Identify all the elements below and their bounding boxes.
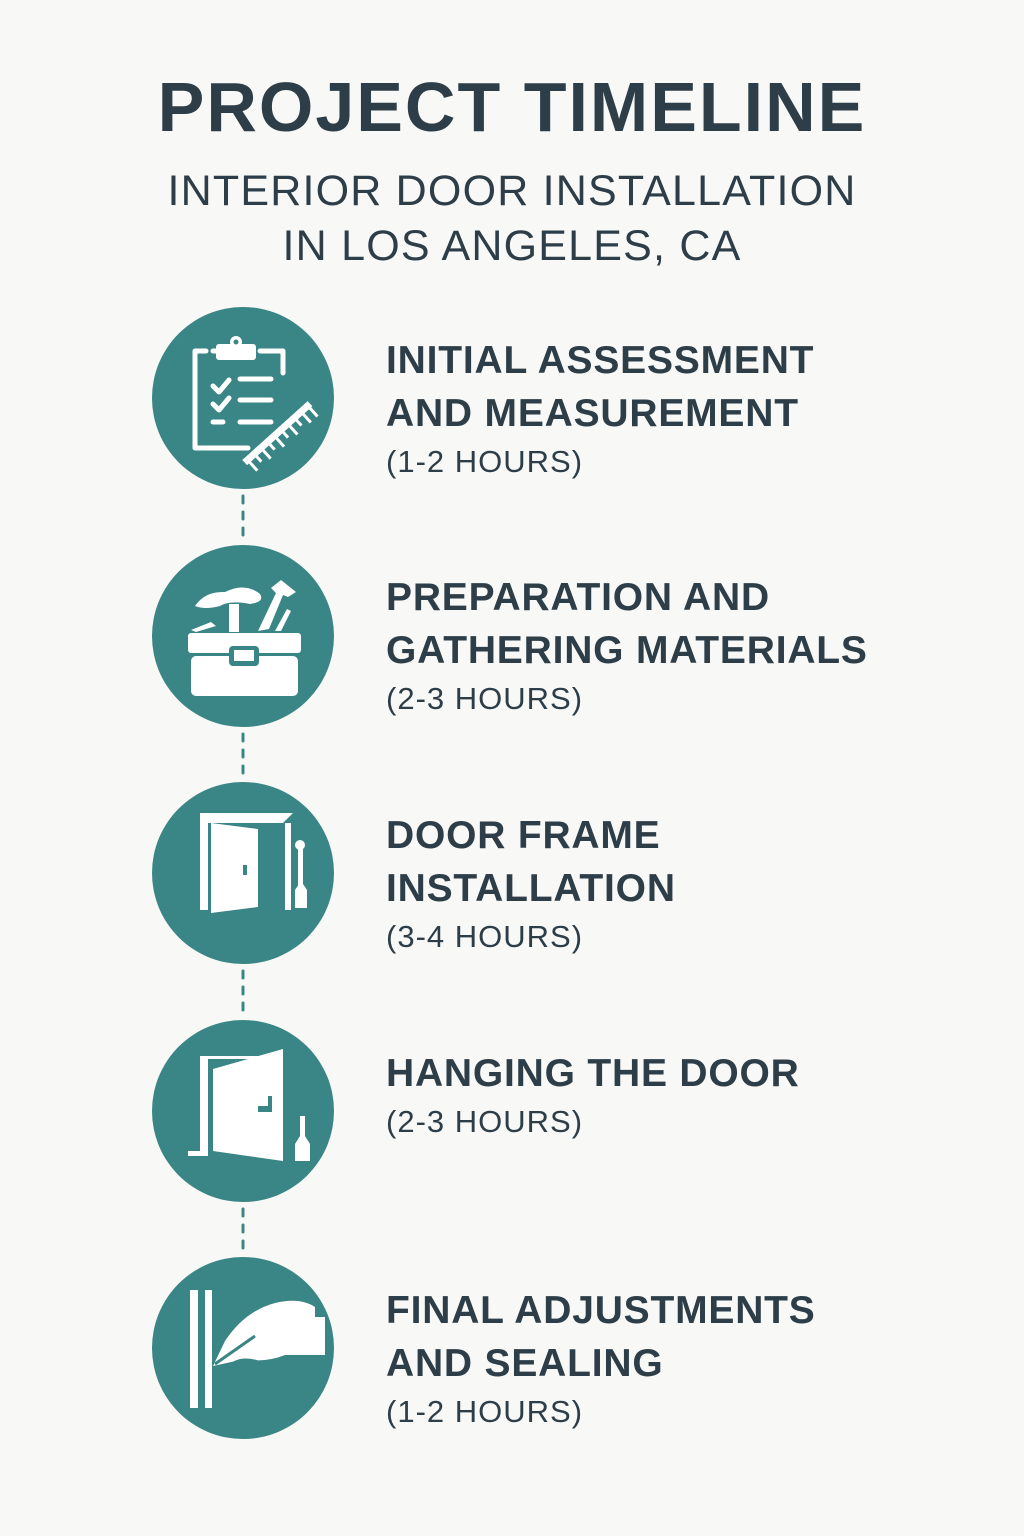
subtitle: INTERIOR DOOR INSTALLATION [167,167,856,215]
step 3 text: (3-4 HOURS) [386,919,583,954]
subtitle [167,167,856,270]
step 4 text [386,1052,800,1139]
subtitle: IN LOS ANGELES, CA [283,222,741,270]
icon: clipboard with ruler [152,307,334,489]
icon: hand sealing [152,1257,334,1439]
step 2 text: GATHERING MATERIALS [386,629,868,672]
step 3 text [386,814,676,954]
title: PROJECT TIMELINE [158,68,866,146]
step 2 text [386,576,868,716]
step 2 text: (2-3 HOURS) [386,681,583,716]
step 2 text: PREPARATION AND [386,576,770,619]
step 5 text: (1-2 HOURS) [386,1394,583,1429]
icon: door frame with tools [152,782,334,964]
step 1 text: INITIAL ASSESSMENT [386,339,814,382]
dashed connector line [242,496,244,1255]
step 5 text [386,1289,816,1429]
step 3 text: INSTALLATION [386,867,676,910]
step 1 text [386,339,814,479]
step 3 text: DOOR FRAME [386,814,660,857]
icon: toolbox [152,545,334,727]
step 4 text: (2-3 HOURS) [386,1104,583,1139]
step 4 text: HANGING THE DOOR [386,1052,800,1095]
step 1 text: (1-2 HOURS) [386,444,583,479]
icon: hanging the door [152,1020,334,1202]
step 5 text: FINAL ADJUSTMENTS [386,1289,816,1332]
step 5 text: AND SEALING [386,1342,663,1385]
step 1 text: AND MEASUREMENT [386,392,799,435]
